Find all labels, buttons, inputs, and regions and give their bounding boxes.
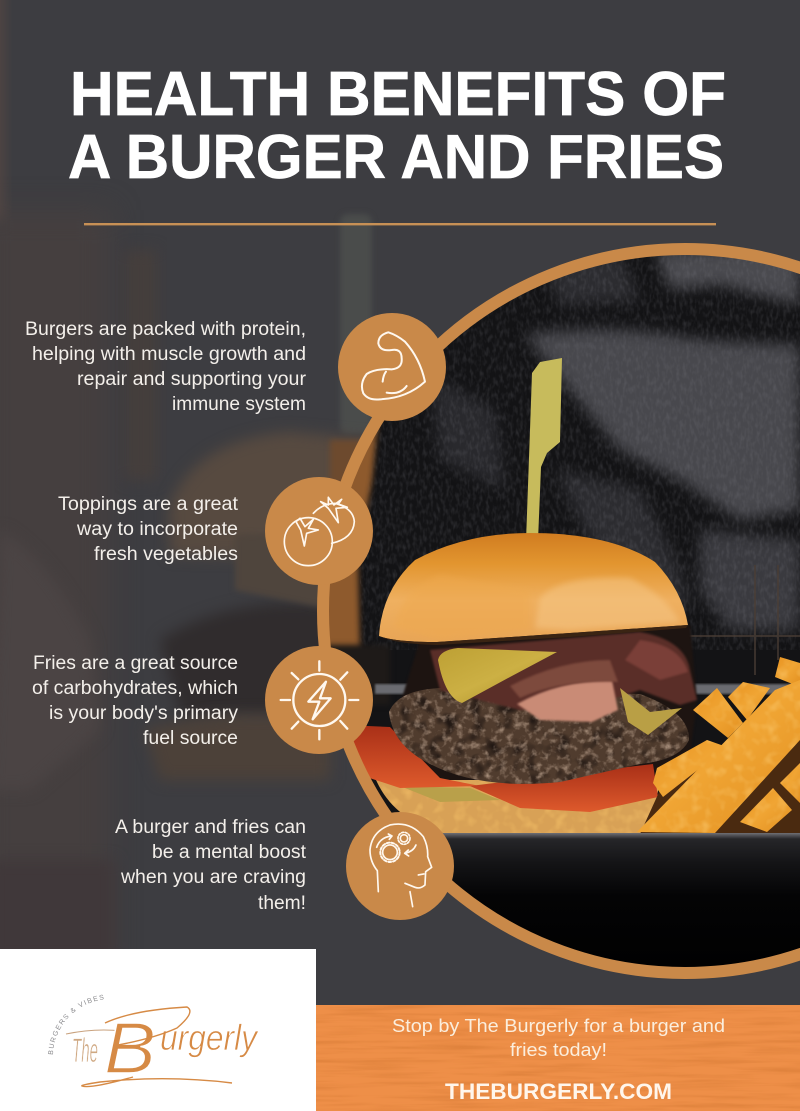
text: protein (25, 319, 307, 415)
plate rim (375, 684, 800, 694)
icon: flexed muscle (338, 313, 446, 421)
logo: The Burgerly: urgerly (160, 1017, 259, 1058)
logo: The Burgerly (48, 994, 259, 1089)
text: mental boost (115, 817, 307, 914)
panel: burger photo in circle (320, 240, 800, 983)
patty (389, 688, 689, 784)
tomato (345, 725, 480, 788)
title: HEALTH BENEFITS OF (70, 59, 726, 129)
text: mental boost: be a mental boost (152, 842, 307, 863)
brown blurred column at left (329, 426, 382, 648)
title (68, 59, 726, 192)
logo: The Burgerly: BURGERS & VIBES (48, 994, 104, 1054)
dark filling behind burger (392, 625, 697, 790)
text: protein: helping with muscle growth and (32, 344, 306, 365)
call to action text (392, 1015, 725, 1060)
text: fries: fuel source (143, 728, 238, 749)
bottom bun (376, 780, 660, 834)
grey apron cloth (430, 250, 800, 630)
top bun (379, 533, 688, 642)
icon: energy bolt sun (265, 646, 373, 754)
text: fries: of carbohydrates, which (32, 678, 238, 699)
call to action text: Stop by The Burgerly for a burger and (392, 1015, 725, 1036)
text: mental boost: A burger and fries can (115, 817, 306, 838)
skewer (526, 358, 562, 541)
text: toppings: fresh vegetables (94, 544, 238, 565)
text: protein: repair and supporting your (77, 369, 307, 390)
logo: The Burgerly: The (72, 1032, 98, 1070)
text: fries: is your body's primary (49, 703, 239, 724)
cheese (438, 648, 557, 703)
panel: call to action wood bar (316, 1005, 800, 1111)
title: A BURGER AND FRIES (68, 122, 724, 192)
text: fries: Fries are a great source (33, 653, 238, 674)
background: blurred burger photo (0, 0, 372, 799)
text: toppings: Toppings are a great (58, 494, 239, 515)
plate base (442, 833, 800, 967)
text: mental boost: them! (258, 893, 306, 914)
text: fries (32, 653, 239, 749)
bacon (430, 632, 697, 710)
logo: The Burgerly: B (104, 1009, 156, 1089)
text: toppings: way to incorporate (76, 519, 238, 540)
icon: head with gears (346, 812, 454, 920)
call to action text: fries today! (510, 1039, 607, 1060)
text: protein: immune system (172, 394, 306, 415)
website: THEBURGERLY.COM (445, 1079, 672, 1104)
text: protein: Burgers are packed with protein, (25, 319, 306, 340)
text: mental boost: when you are craving (120, 867, 306, 888)
title divider (84, 223, 716, 225)
fries (640, 740, 800, 833)
text: toppings (58, 494, 239, 565)
icon: tomatoes (265, 477, 373, 585)
white logo panel mask (0, 949, 316, 1111)
ring around photo (323, 249, 800, 973)
